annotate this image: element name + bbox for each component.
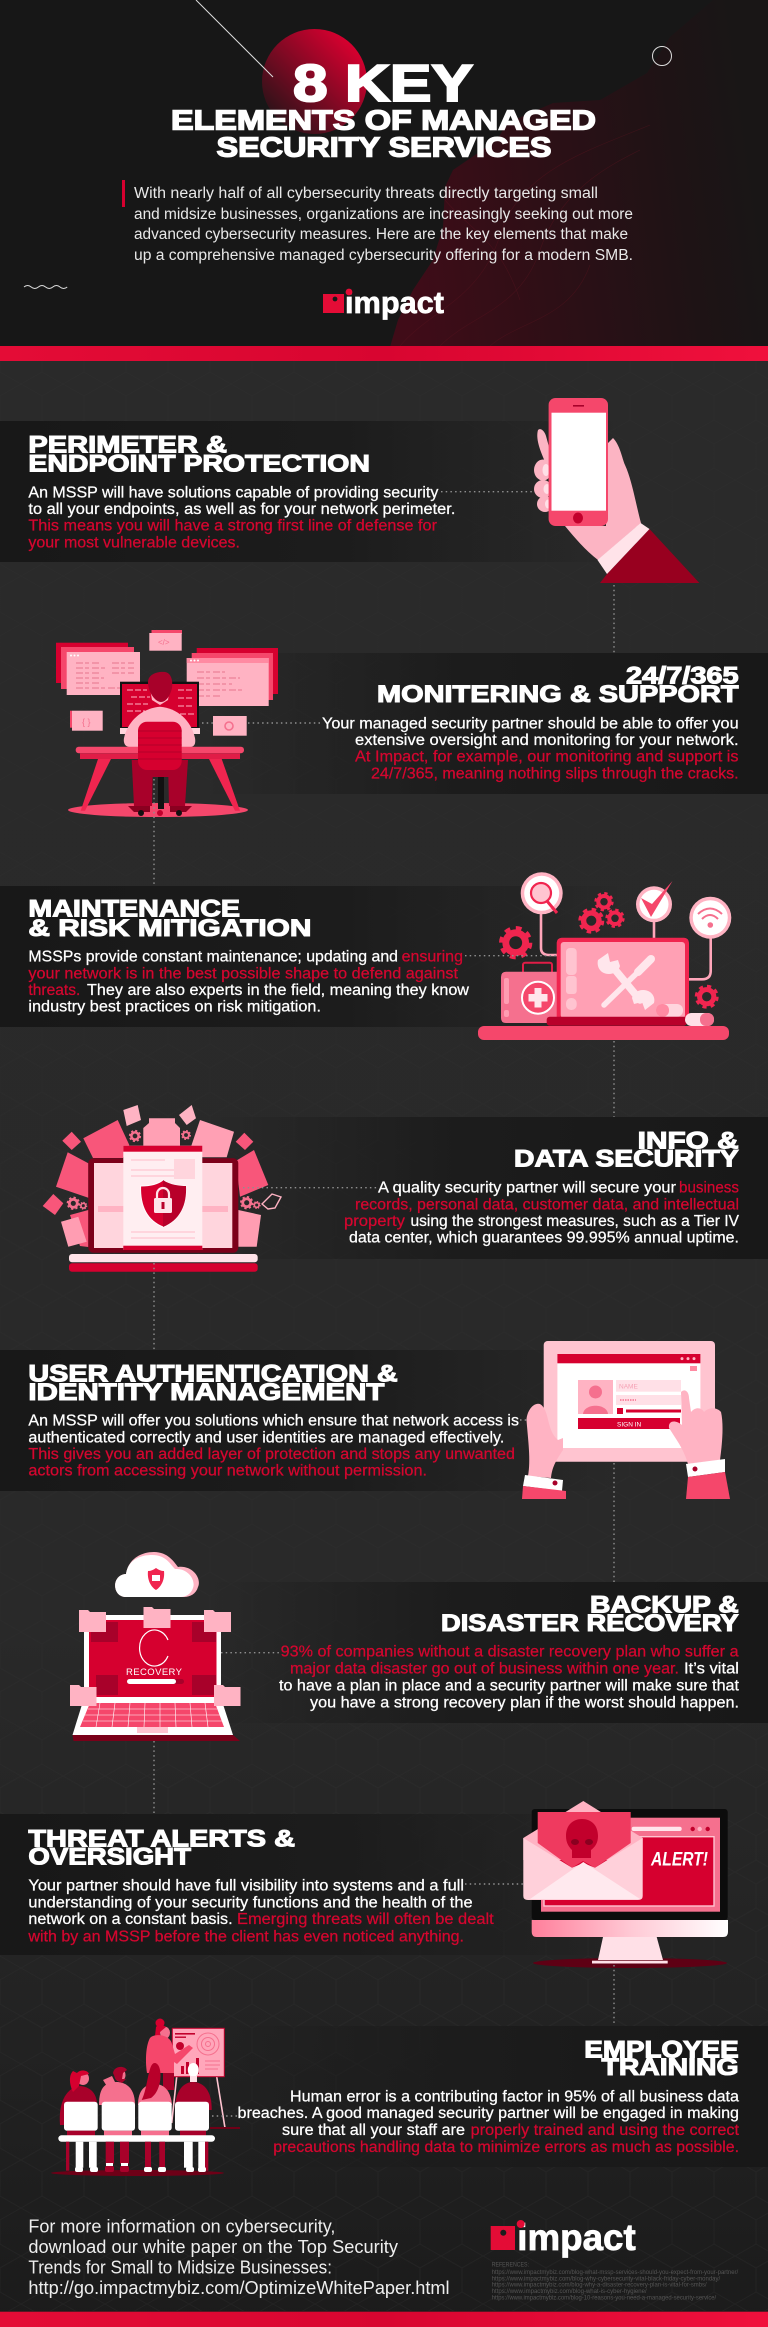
heading xyxy=(28,1826,295,1871)
heading: USER AUTHENTICATION & xyxy=(28,1361,398,1388)
body text: precautions handling data to minimize errors as much as possible. xyxy=(273,2139,739,2156)
heading xyxy=(377,662,739,708)
body text: properly trained and using the correct xyxy=(471,2122,740,2139)
icon: cloud recovery laptop xyxy=(70,1552,240,1741)
body text: understanding of your security functions and the health of the xyxy=(28,1894,473,1911)
squiggle xyxy=(24,286,67,288)
body text: business xyxy=(679,1180,739,1197)
body text xyxy=(238,2088,740,2156)
heading xyxy=(584,2036,739,2081)
heading xyxy=(28,896,311,942)
heading: MAINTENANCE xyxy=(28,896,240,923)
body text: with by an MSSP before the client has even noticed anything. xyxy=(27,1928,464,1945)
references xyxy=(492,2263,739,2302)
panel: user authentication and identity management xyxy=(0,1350,620,1491)
body text: data center, which guarantees 99.995% annual uptime. xyxy=(349,1230,739,1247)
body text: This gives you an added layer of protection and stops any unwanted xyxy=(28,1446,515,1463)
body text: records, personal data, customer data, and intellectual xyxy=(355,1196,739,1213)
icon: person at desk with code windows xyxy=(56,630,278,817)
references: https://www.impactmybiz.com/blog-what-is-cyber-hygiene/ xyxy=(492,2289,647,2295)
body text: authenticated correctly and user identities are managed effectively. xyxy=(28,1429,504,1446)
heading: MONITERING & SUPPORT xyxy=(377,681,739,708)
body text: sure that all your staff are xyxy=(282,2122,465,2139)
heading: THREAT ALERTS & xyxy=(28,1826,295,1853)
heading: ENDPOINT PROTECTION xyxy=(28,451,370,478)
body text: major data disaster go out of business within one year. xyxy=(290,1660,679,1677)
icon: person at desk with code windows: { } xyxy=(82,717,91,727)
footer call to action: download our white paper on the Top Security xyxy=(28,2237,398,2257)
heading: DATA SECURITY xyxy=(514,1146,739,1173)
body text: property xyxy=(344,1213,405,1230)
body text xyxy=(28,949,470,1016)
body text: 24/7/365, meaning nothing slips through the cracks. xyxy=(371,765,739,782)
panel: 24/7/365 monitoring and support xyxy=(210,653,768,794)
footer call to action: Trends for Small to Midsize Businesses: xyxy=(28,2258,332,2278)
body text: An MSSP will offer you solutions which ensure that network access is xyxy=(28,1413,519,1430)
body text: your network is in the best possible shape to defend against xyxy=(28,965,459,982)
body text xyxy=(279,1644,740,1711)
logo: impact header: impact xyxy=(345,285,444,320)
heading: BACKUP & xyxy=(590,1591,739,1618)
panel: employee training xyxy=(210,2026,768,2167)
icon: monitor with alert envelope xyxy=(523,1801,728,1968)
references: https://www.impactmybiz.com/blog-what-mssp-services-should-you-expect-from-your-partner/ xyxy=(492,2270,739,2276)
heading xyxy=(514,1127,739,1173)
heading: TRAINING xyxy=(602,2054,739,2081)
heading: PERIMETER & xyxy=(28,432,227,459)
body text xyxy=(322,715,739,782)
header panel xyxy=(0,0,768,347)
body text: An MSSP will have solutions capable of providing security xyxy=(28,484,439,501)
connector dotted lines xyxy=(154,492,614,2116)
body text: Your partner should have full visibility into systems and a full xyxy=(28,1878,464,1894)
footer call to action xyxy=(28,2216,450,2298)
icon: laptop with tools and gears xyxy=(478,872,731,1040)
body text: breaches. A good managed security partner will be engaged in making xyxy=(238,2105,739,2122)
body text: At Impact, for example, our monitoring and support is xyxy=(355,749,739,766)
body text xyxy=(27,1878,494,1945)
decorative red mesh wave xyxy=(390,0,768,347)
icon: laptop with shield and flying documents xyxy=(43,1105,281,1272)
references: https://www.impactmybiz.com/blog-10-reasons-you-need-a-managed-security-service/ xyxy=(492,2296,717,2302)
heading: IDENTITY MANAGEMENT xyxy=(28,1379,385,1406)
small ring xyxy=(652,46,672,66)
body text xyxy=(28,1413,519,1480)
body text: Human error is a contributing factor in 95% of all business data xyxy=(290,2088,739,2105)
body text: A quality security partner will secure your xyxy=(378,1180,676,1197)
body text: ensuring xyxy=(402,949,463,966)
footer call to action: For more information on cybersecurity, xyxy=(28,2216,335,2236)
intro text block: With nearly half of all cybersecurity threats directly targeting small xyxy=(134,185,598,202)
intro text block: up a comprehensive managed cybersecurity offering for a modern SMB. xyxy=(134,247,633,264)
body text: threats. xyxy=(28,982,80,999)
heading: EMPLOYEE xyxy=(584,2036,739,2064)
title: ELEMENTS OF MANAGED xyxy=(171,104,596,136)
body text: MSSPs provide constant maintenance; updating and xyxy=(28,949,398,966)
icon: monitor with alert envelope: ALERT! xyxy=(650,1850,708,1871)
heading: OVERSIGHT xyxy=(28,1844,191,1871)
icon: tablet login with hands: SIGN IN xyxy=(617,1422,642,1428)
icon: training presentation xyxy=(51,2018,240,2176)
body text: using the strongest measures, such as a Tier IV xyxy=(410,1213,740,1230)
footer call to action: http://go.impactmybiz.com/OptimizeWhitePaper.html xyxy=(28,2278,450,2298)
panel: threat alerts and oversight xyxy=(0,1814,620,1955)
title xyxy=(171,55,596,162)
red band top xyxy=(0,346,768,361)
body text: They are also experts in the field, meaning they know xyxy=(87,982,470,999)
heading xyxy=(28,432,370,478)
heading xyxy=(28,1361,398,1406)
body text: network on a constant basis. xyxy=(28,1911,233,1928)
body text xyxy=(344,1180,740,1247)
body text: extensive oversight and monitoring for your network. xyxy=(355,732,739,749)
intro text block: and midsize businesses, organizations are increasingly seeking out more xyxy=(134,206,633,223)
heading: 24/7/365 xyxy=(626,662,739,689)
references: REFERENCES: xyxy=(492,2263,529,2269)
icon: tablet login with hands xyxy=(522,1341,730,1499)
panel: perimeter and endpoint protection xyxy=(0,421,620,562)
body text: industry best practices on risk mitigation. xyxy=(28,999,321,1016)
body text: actors from accessing your network without permission. xyxy=(28,1463,427,1480)
heading: DISASTER RECOVERY xyxy=(441,1610,739,1637)
title: SECURITY SERVICES xyxy=(216,132,552,162)
red band bottom xyxy=(0,2312,768,2327)
diagonal white line xyxy=(196,0,273,77)
panel: info and data security xyxy=(210,1117,768,1259)
icon: hand holding phone xyxy=(534,398,699,583)
panel: maintenance and risk mitigation xyxy=(0,886,620,1027)
intro text block: advanced cybersecurity measures. Here are the key elements that make xyxy=(134,226,628,243)
heading xyxy=(441,1591,739,1637)
references: https://www.impactmybiz.com/blog-why-cybersecurity-vital-black-friday-cyber-monday/ xyxy=(492,2276,721,2282)
body text: 93% of companies without a disaster recovery plan who suffer a xyxy=(281,1644,739,1661)
body text: your most vulnerable devices. xyxy=(28,534,240,551)
body text: This means you will have a strong first line of defense for xyxy=(28,518,437,535)
logo: impact footer: impact xyxy=(517,2217,636,2258)
references: https://www.impactmybiz.com/blog-why-a-disaster-recovery-plan-is-vital-for-smbs/ xyxy=(492,2283,707,2289)
body text: to all your endpoints, as well as for your network perimeter. xyxy=(28,501,455,518)
red gradient circle xyxy=(262,29,367,134)
heading: INFO & xyxy=(638,1127,739,1154)
body text xyxy=(28,484,455,551)
body text: Your managed security partner should be able to offer you xyxy=(322,715,739,732)
icon: person at desk with code windows: </> xyxy=(158,638,170,647)
icon: cloud recovery laptop: RECOVERY xyxy=(126,1667,183,1678)
title: 8 KEY xyxy=(293,55,473,113)
panel: backup and disaster recovery xyxy=(210,1582,768,1723)
icon: tablet login with hands: NAME xyxy=(619,1384,638,1390)
body text: Emerging threats will often be dealt xyxy=(237,1911,494,1928)
heading: & RISK MITIGATION xyxy=(28,915,311,942)
body text: you have a strong recovery plan if the worst should happen. xyxy=(310,1694,739,1711)
body text: It’s vital xyxy=(684,1660,739,1677)
body text: to have a plan in place and a security partner will make sure that xyxy=(279,1678,740,1695)
intro text block xyxy=(122,180,633,264)
